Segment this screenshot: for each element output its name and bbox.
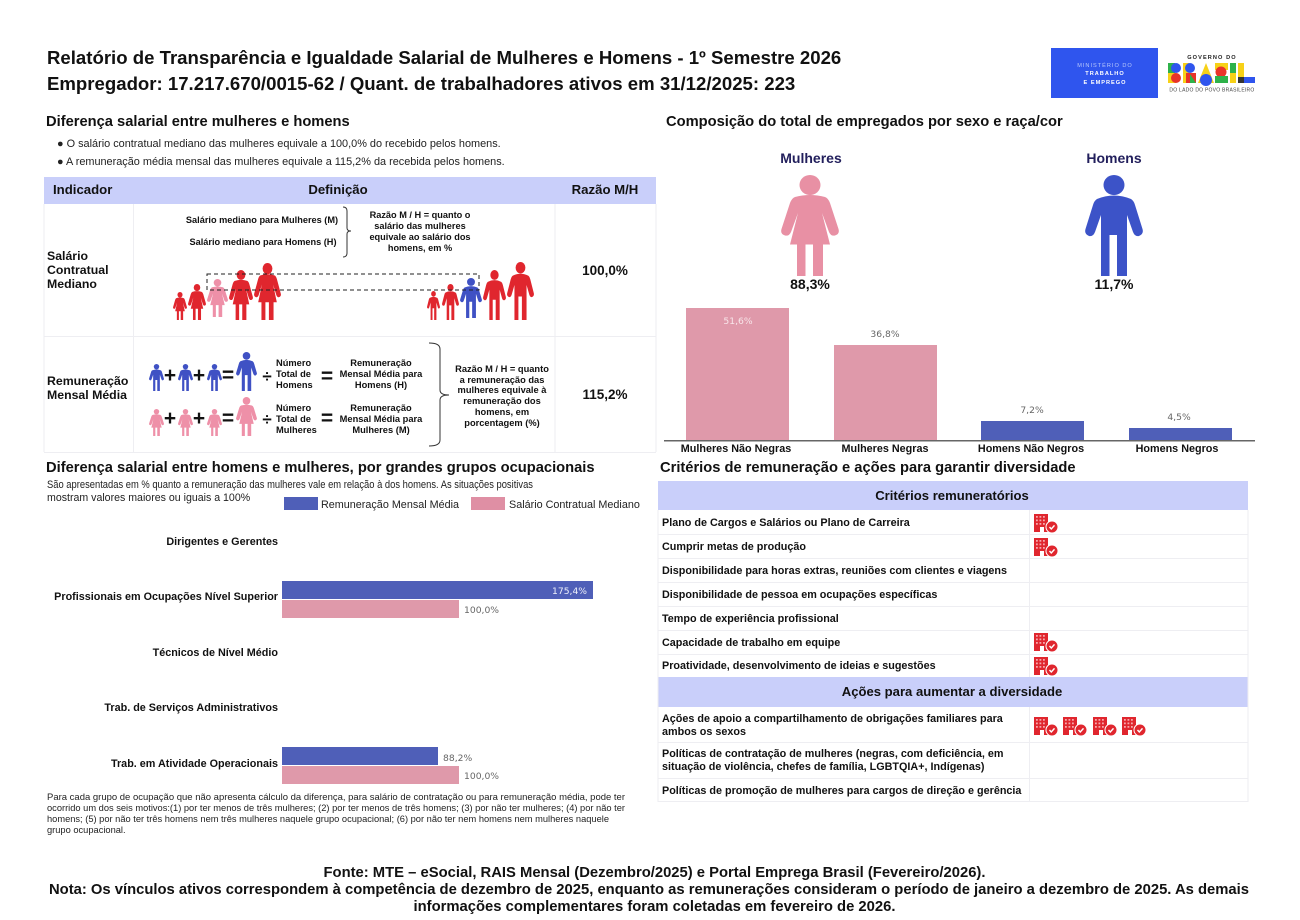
text: remuneração média mulheres: Remuneração [350,403,412,413]
definition: razão remuneração: Razão M / H = quanto [455,364,549,374]
bar chart: Trab. de Serviços Administrativos [104,702,278,714]
text block: nota de motivos: Para cada grupo de ocupação que não apresenta cálculo da diferença, para salário de contratação ou para remuneração média, pode ter [47,792,625,802]
bar chart: Técnicos de Nível Médio [153,647,278,659]
text block: nota de motivos: grupo ocupacional. [47,825,126,835]
icon: soma de homens: + [193,364,205,387]
column chart [664,308,1255,455]
legend: Remuneração Mensal Média [321,499,459,511]
icon: soma de mulheres: ÷ [262,410,272,429]
row label: salário contratual mediano: Salário [47,249,88,263]
brace: remuneração [429,343,449,446]
column chart: Homens Negros [1136,443,1218,455]
definition: razão salário [369,210,471,253]
text block: nota de motivos: homens; (5) por não ter três homens nem três mulheres naquele grupo ocupacional; (6) por não ter nem homens nem mulheres naquele [47,814,609,824]
text block: nota de motivos [47,792,625,835]
heading: grupos ocupacionais: Diferença salarial entre homens e mulheres, por grandes grupos ocupacionais [46,460,595,476]
actions list: Políticas de contratação de mulheres (negras, com deficiência, em [662,748,1003,760]
footer: informações complementares foram coletadas em fevereiro de 2026. [414,899,895,915]
column chart: 51,6% [723,316,753,327]
logo: Governo do Brasil: GOVERNO DO [1187,55,1237,61]
label: mulheres: Mulheres [780,150,842,166]
heading: critérios: Critérios de remuneração e ações para garantir diversidade [660,460,1076,476]
row label: remuneração mensal média [47,374,129,402]
logo: Ministério do Trabalho e Emprego: E EMPREGO [1084,80,1126,86]
text block: nota de motivos: ocorrido um dos seis motivos:(1) por ter menos de três mulheres; (2) por ter menos de três homens; (3) por não ter mulheres; (4) por não ter [47,803,625,813]
criteria list: Tempo de experiência profissional [662,613,839,625]
bar chart [54,536,593,784]
heading: diferença salarial: Diferença salarial entre mulheres e homens [46,114,350,130]
definition text: salário mediano [186,215,338,247]
actions list: situação de violência, chefes de família, LGBTQIA+, Indígenas) [662,761,985,773]
logo: Ministério do Trabalho e Emprego: TRABALHO [1085,71,1125,77]
value: 100,0%: 100,0% [582,263,628,278]
criteria list: Plano de Cargos e Salários ou Plano de Carreira [662,517,911,529]
brace: salário mediano [343,207,351,257]
text: remuneração média homens: Homens (H) [355,380,407,390]
text: remuneração média mulheres: Mulheres (M) [352,425,410,435]
icon: soma de mulheres: = [321,407,333,430]
table header: Indicador [53,182,112,197]
bar chart: Profissionais em Ocupações Nível Superior [54,591,279,603]
text: número total de mulheres: Número [276,403,311,413]
table header: ações: Ações para aumentar a diversidade [842,684,1062,699]
row label: remuneração mensal média: Remuneração [47,374,129,388]
criteria list: Capacidade de trabalho em equipe [662,637,840,649]
row label: remuneração mensal média: Mensal Média [47,388,127,402]
bar chart: 100,0% [464,605,499,616]
icon: soma de homens [149,352,333,391]
criteria list [662,517,1007,672]
row label: salário contratual mediano [47,249,108,291]
table header: critérios remuneratórios: Critérios remuneratórios [875,488,1029,503]
value: 115,2%: 115,2% [582,387,628,402]
table header: Razão M/H [572,182,638,197]
panel: composição [664,114,1255,455]
definition: razão remuneração: homens, em [475,407,529,417]
text: número total de mulheres: Total de [276,414,311,424]
definition: razão salário: equivale ao salário dos [369,232,471,242]
table grid [44,177,656,452]
footer [49,865,1249,915]
logo: Governo do Brasil [1168,55,1255,94]
table grid [658,481,1248,802]
text: número total de homens: Total de [276,369,311,379]
bar chart: 175,4% [552,586,587,597]
icon: soma de mulheres: + [193,407,205,430]
panel: critérios e ações [658,460,1248,802]
definition: razão salário: salário das mulheres [374,221,466,231]
bar chart: Trab. em Atividade Operacionais [111,758,278,770]
criteria list: Cumprir metas de produção [662,541,806,553]
text: número total de mulheres: Mulheres [276,425,317,435]
icon: soma de mulheres [149,397,333,436]
icon: grupo de homens em ordem de salário [427,262,534,320]
definition: razão remuneração: mulheres equivale à [458,385,547,395]
actions list: Ações de apoio a compartilhamento de obrigações familiares para [662,713,1004,725]
text: remuneração média homens: Mensal Média para [340,369,423,379]
icon: grupo de mulheres em ordem de salário [173,263,281,320]
logo: Governo do Brasil: DO LADO DO POVO BRASILEIRO [1169,88,1255,94]
row label: salário contratual mediano: Contratual [47,263,108,277]
bar chart: 88,2% [443,753,472,764]
footer: Fonte: MTE – eSocial, RAIS Mensal (Dezembro/2025) e Portal Emprega Brasil (Fevereiro/2026). [324,865,985,881]
criteria list: Proatividade, desenvolvimento de ideias e sugestões [662,660,936,672]
logo: Ministério do Trabalho e Emprego: MINISTÉRIO DO [1077,62,1133,69]
text: remuneração média mulheres: Mensal Média para [340,414,423,424]
text: remuneração média homens [340,358,423,390]
actions list: ambos os sexos [662,726,746,738]
text block: resumo: ● O salário contratual mediano das mulheres equivale a 100,0% do recebido pelos homens. [57,138,501,150]
label: homens: Homens [1086,150,1142,166]
title: Empregador: 17.217.670/0015-62 / Quant. de trabalhadores ativos em 31/12/2025: 223 [47,73,795,94]
heading: composição: Composição do total de empregados por sexo e raça/cor [666,114,1063,130]
title: Relatório de Transparência e Igualdade Salarial de Mulheres e Homens - 1º Semestre 2026 [47,47,841,68]
row label: salário contratual mediano: Mediano [47,277,97,291]
definition: razão remuneração [455,364,549,428]
text: número total de homens [276,358,313,390]
table header: Definição [308,182,368,197]
criteria list: Disponibilidade de pessoa em ocupações específicas [662,589,937,601]
legend [284,497,640,511]
text: remuneração média homens: Remuneração [350,358,412,368]
value: 88,3%: 88,3% [790,276,830,292]
column chart: Mulheres Negras [841,443,929,455]
column chart: Homens Não Negros [978,443,1084,455]
text block: resumo [57,138,505,168]
value: 11,7%: 11,7% [1095,276,1134,292]
dashed median box [207,274,479,290]
text block: explicação: São apresentadas em % quanto a remuneração das mulheres vale em relação à dos homens. As situações positivas [47,479,533,491]
text block: resumo: ● A remuneração média mensal das mulheres equivale a 115,2% da recebida pelos homens. [57,156,505,168]
actions list [662,713,1022,797]
text: número total de homens: Homens [276,380,313,390]
definition: razão salário: homens, em % [388,243,452,253]
icon: soma de homens: = [321,365,333,388]
text block: explicação [47,479,533,504]
text: número total de homens: Número [276,358,311,368]
column chart: 7,2% [1020,405,1044,416]
definition: razão salário: Razão M / H = quanto o [370,210,471,220]
definition: razão remuneração: a remuneração das [460,375,544,385]
text block: explicação: mostram valores maiores ou iguais a 100% [47,492,251,504]
icon: mulher [781,175,839,276]
panel: diferença salarial [44,114,656,452]
panel: grupos ocupacionais [46,460,640,835]
column chart: Mulheres Não Negras [681,443,791,455]
definition text: salário mediano: Salário mediano para Mulheres (M) [186,215,338,225]
definition text: salário mediano: Salário mediano para Homens (H) [189,237,337,247]
definition: razão remuneração: remuneração dos [463,396,541,406]
icon: soma de mulheres: = [222,407,234,430]
logo: Ministério do Trabalho e Emprego [1051,48,1158,98]
column chart: 4,5% [1167,412,1191,423]
bar chart: 100,0% [464,771,499,782]
criteria list: Disponibilidade para horas extras, reuniões com clientes e viagens [662,565,1007,577]
text: número total de mulheres [276,403,317,435]
footer: Nota: Os vínculos ativos correspondem à competência de dezembro de 2025, enquanto as remunerações consideram o período de janeiro a dezembro de 2025. As demais [49,882,1249,898]
title [47,47,841,94]
definition: razão remuneração: porcentagem (%) [464,418,540,428]
bar chart: Dirigentes e Gerentes [166,536,278,548]
icon: soma de homens: = [222,364,234,387]
icon: soma de homens: + [164,364,176,387]
actions list: Políticas de promoção de mulheres para cargos de direção e gerência [662,785,1022,797]
table header [53,182,638,197]
legend: Salário Contratual Mediano [509,499,640,511]
column chart: 36,8% [870,329,900,340]
icon: homem [1085,175,1143,276]
icon: soma de homens: ÷ [262,367,272,386]
icon: soma de mulheres: + [164,407,176,430]
icons: ações adotadas [1034,717,1146,736]
text: remuneração média mulheres [340,403,423,435]
icons: critérios adotados [1034,514,1058,676]
